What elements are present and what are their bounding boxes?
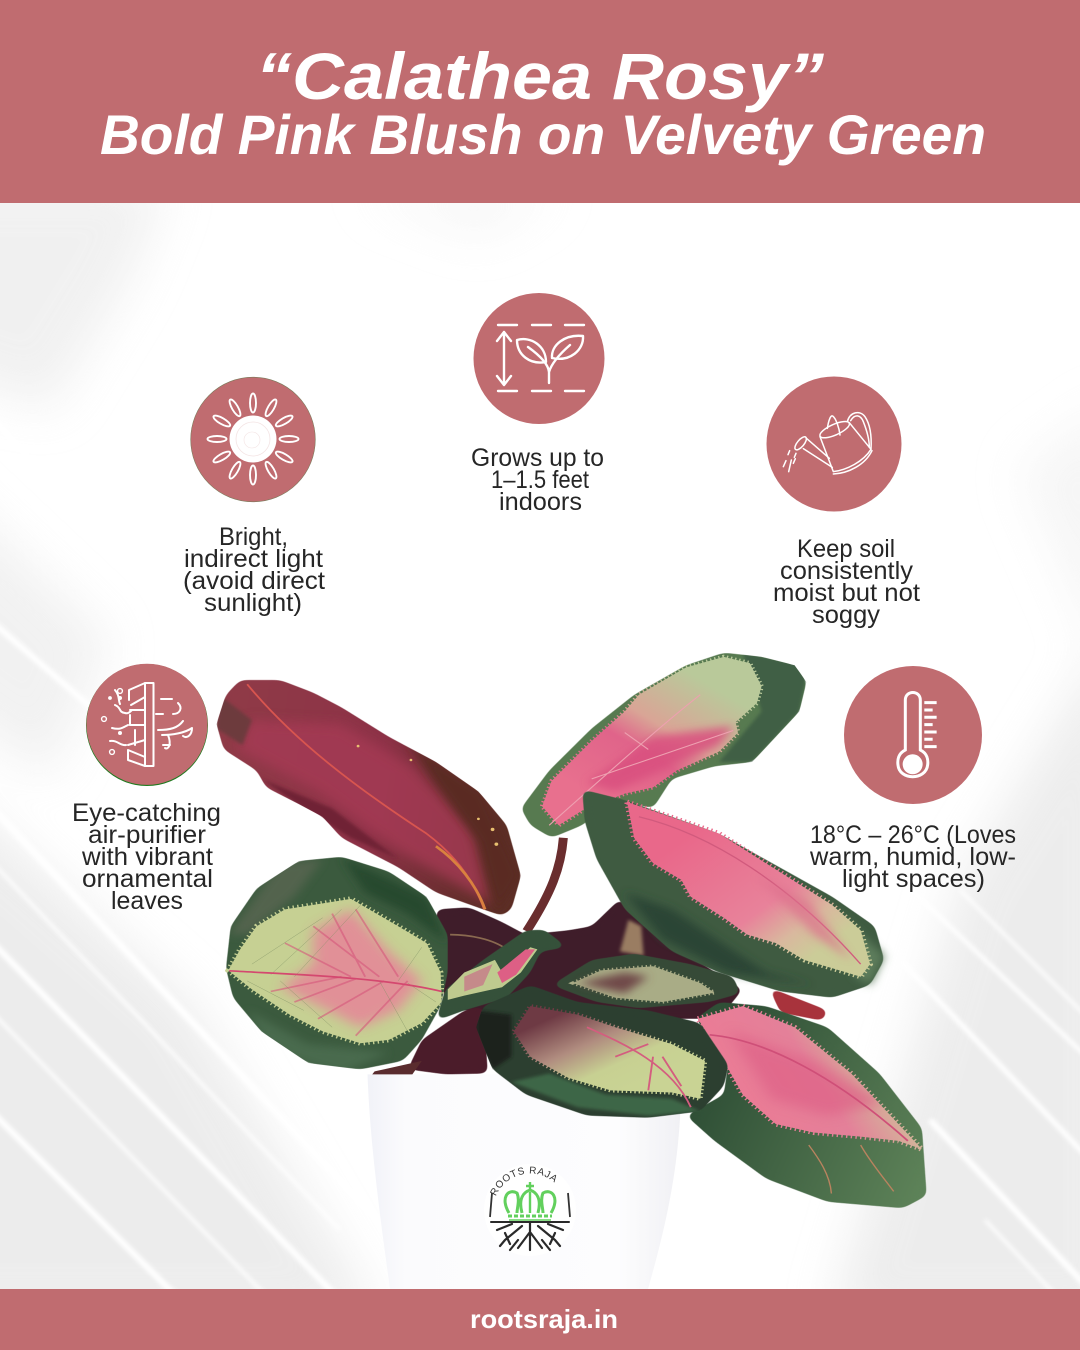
plant photo in white pot	[216, 653, 926, 1288]
care item: watering	[766, 376, 920, 629]
leaf: centre horizontal	[552, 954, 740, 1008]
text: temperature	[809, 821, 1016, 893]
text: air purifier: leaves	[111, 887, 183, 915]
text: watering: soggy	[812, 601, 881, 629]
text: air purifier	[72, 799, 221, 915]
text: air purifier: with vibrant	[81, 843, 213, 871]
text: air purifier: ornamental	[82, 865, 213, 893]
text: temperature: 18°C – 26°C (Loves	[810, 821, 1016, 849]
footer band	[0, 1289, 1080, 1350]
text: light: Bright,	[219, 523, 288, 551]
leaf: lower centre	[476, 985, 729, 1118]
crown	[505, 1182, 555, 1220]
title	[100, 39, 986, 166]
text: height	[471, 444, 604, 516]
text: temperature: warm, humid, low-	[809, 843, 1016, 871]
website url: rootsraja.in	[470, 1304, 618, 1334]
logo sticker: ROOTS RAJA	[490, 1166, 556, 1196]
icon: sun	[191, 377, 315, 502]
care item: air purifier	[72, 664, 221, 915]
icon: air filter	[86, 664, 208, 786]
text: air purifier: air-purifier	[88, 821, 206, 849]
text: height: Grows up to	[471, 444, 604, 472]
text: light: sunlight)	[204, 589, 302, 617]
text: temperature: light spaces)	[842, 865, 985, 893]
text: light	[183, 523, 325, 617]
text: height: indoors	[499, 488, 582, 516]
leaf: top right pink	[521, 653, 809, 838]
logo sticker	[489, 1166, 571, 1252]
care item: temperature	[809, 666, 1016, 893]
leaves	[217, 653, 927, 1208]
care item: light	[183, 377, 325, 617]
leaf: small centre	[436, 930, 567, 1021]
leaf: large right	[582, 789, 884, 998]
dark purple leaves in the centre	[372, 899, 743, 1074]
roots	[491, 1222, 569, 1250]
care item: height	[471, 293, 604, 516]
stem	[527, 838, 563, 931]
text: height: 1–1.5 feet	[491, 466, 589, 494]
icon: thermometer	[844, 666, 982, 804]
leaf: large lower right	[686, 987, 927, 1208]
leaf: dark red top left	[217, 680, 521, 916]
pot	[368, 1074, 681, 1297]
text: watering: moist but not	[773, 579, 920, 607]
text: light: indirect light	[184, 545, 323, 573]
text: watering: consistently	[780, 557, 913, 585]
text: watering: Keep soil	[797, 535, 895, 563]
text: watering	[773, 535, 920, 629]
icon: watering can	[766, 376, 902, 512]
title: “Calathea Rosy”	[256, 39, 824, 113]
header band	[0, 0, 1080, 203]
title: Bold Pink Blush on Velvety Green	[100, 103, 986, 166]
leaf: large left round	[226, 857, 448, 1074]
icon: plant height	[474, 293, 604, 424]
text: air purifier: Eye-catching	[72, 799, 221, 827]
text: light: (avoid direct	[183, 567, 325, 595]
